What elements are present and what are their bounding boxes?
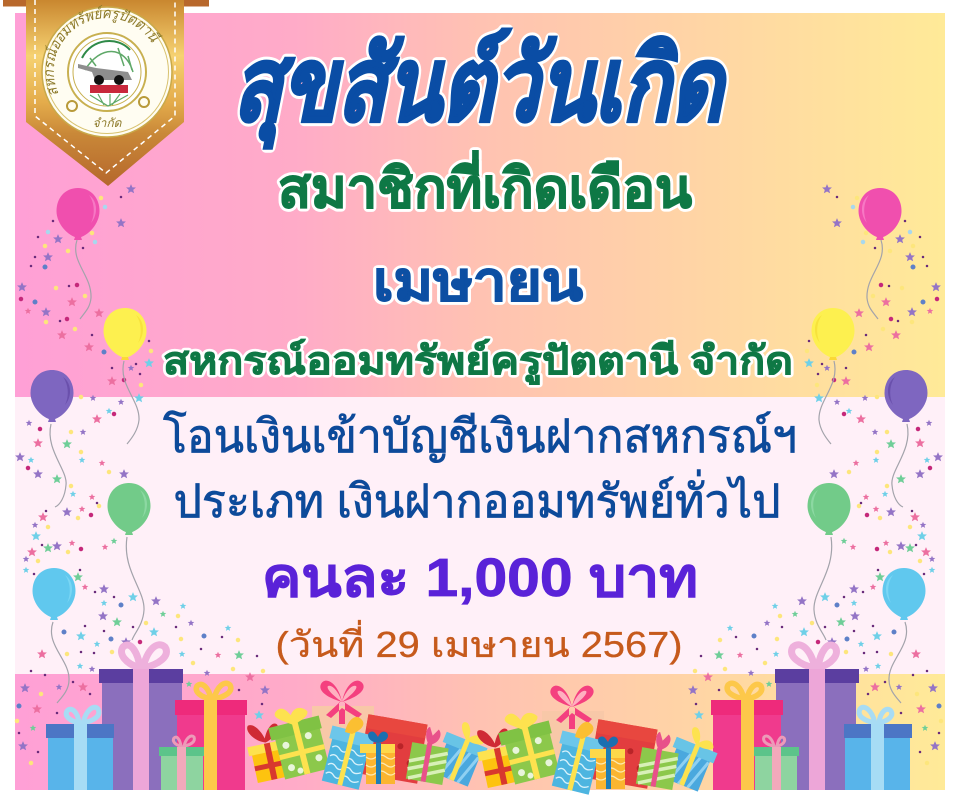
balloon: pink: [56, 188, 100, 240]
panel: pale message band: [15, 397, 945, 674]
gift pile: right: [473, 686, 724, 795]
text: account type: ประเภท เงินฝากออมทรัพย์ทั่วไป: [174, 469, 780, 527]
orange gift with blue bow: [360, 731, 395, 784]
heading: members born in month: สมาชิกที่เกิดเดือน: [278, 150, 692, 219]
striped green gift: [406, 724, 452, 785]
balloon: purple: [30, 370, 74, 422]
banner body: [26, 0, 184, 186]
ribbon banner with cooperative seal: [3, 0, 209, 186]
date: (วันที่ 29 เมษายน 2567): [276, 620, 682, 665]
gold bow: [345, 717, 363, 734]
gift pile: left: [243, 681, 494, 790]
seal bottom text: จำกัด: [93, 116, 123, 130]
heading: month april: เมษายน: [373, 252, 583, 312]
balloon strings: [50, 240, 144, 703]
wavy blue gift: [319, 726, 375, 790]
balloon: yellow: [104, 308, 146, 360]
right decoration: mirrored confetti, balloons and gift boxes: [688, 184, 943, 790]
amount per person: คนละ 1,000 บาท: [262, 548, 698, 608]
cooperative seal: [41, 5, 173, 138]
cooperative seal: สหกรณ์ออมทรัพย์ครูปัตตานี: [45, 5, 162, 94]
banner dashed stitching: [35, 0, 175, 173]
confetti stars and dots: [15, 184, 270, 763]
banner top bar: [3, 0, 209, 6]
gift: pink box: [175, 683, 247, 790]
heading: cooperative name: สหกรณ์ออมทรัพย์ครูปัตตานี จำกัด: [163, 338, 793, 385]
heading: month april: เมษายน: [373, 252, 583, 312]
gift: blue box: [46, 707, 114, 790]
title: happy birthday: สุขสันต์วันเกิด: [233, 28, 728, 149]
faint back box: [312, 706, 374, 750]
big pink bow: [320, 681, 364, 724]
gift: green box: [159, 736, 204, 790]
striped blue gift: [431, 717, 494, 788]
heading: cooperative name: สหกรณ์ออมทรัพย์ครูปัตตานี จำกัด: [163, 338, 793, 385]
red box: [358, 714, 428, 784]
left decoration: confetti, balloons and gift boxes: [15, 184, 270, 790]
title: happy birthday: สุขสันต์วันเกิด: [233, 28, 728, 149]
gold gift with red ribbon: [243, 718, 294, 784]
balloon: sky blue: [32, 568, 76, 620]
seal ring text: [54, 18, 160, 94]
heading: members born in month: สมาชิกที่เกิดเดือน: [278, 150, 692, 219]
green polka gift: [264, 700, 332, 780]
text: transfer to savings account: โอนเงินเข้าบัญชีเงินฝากสหกรณ์ฯ: [163, 410, 797, 462]
gift: purple box: [99, 645, 183, 790]
balloon: green: [108, 483, 150, 535]
